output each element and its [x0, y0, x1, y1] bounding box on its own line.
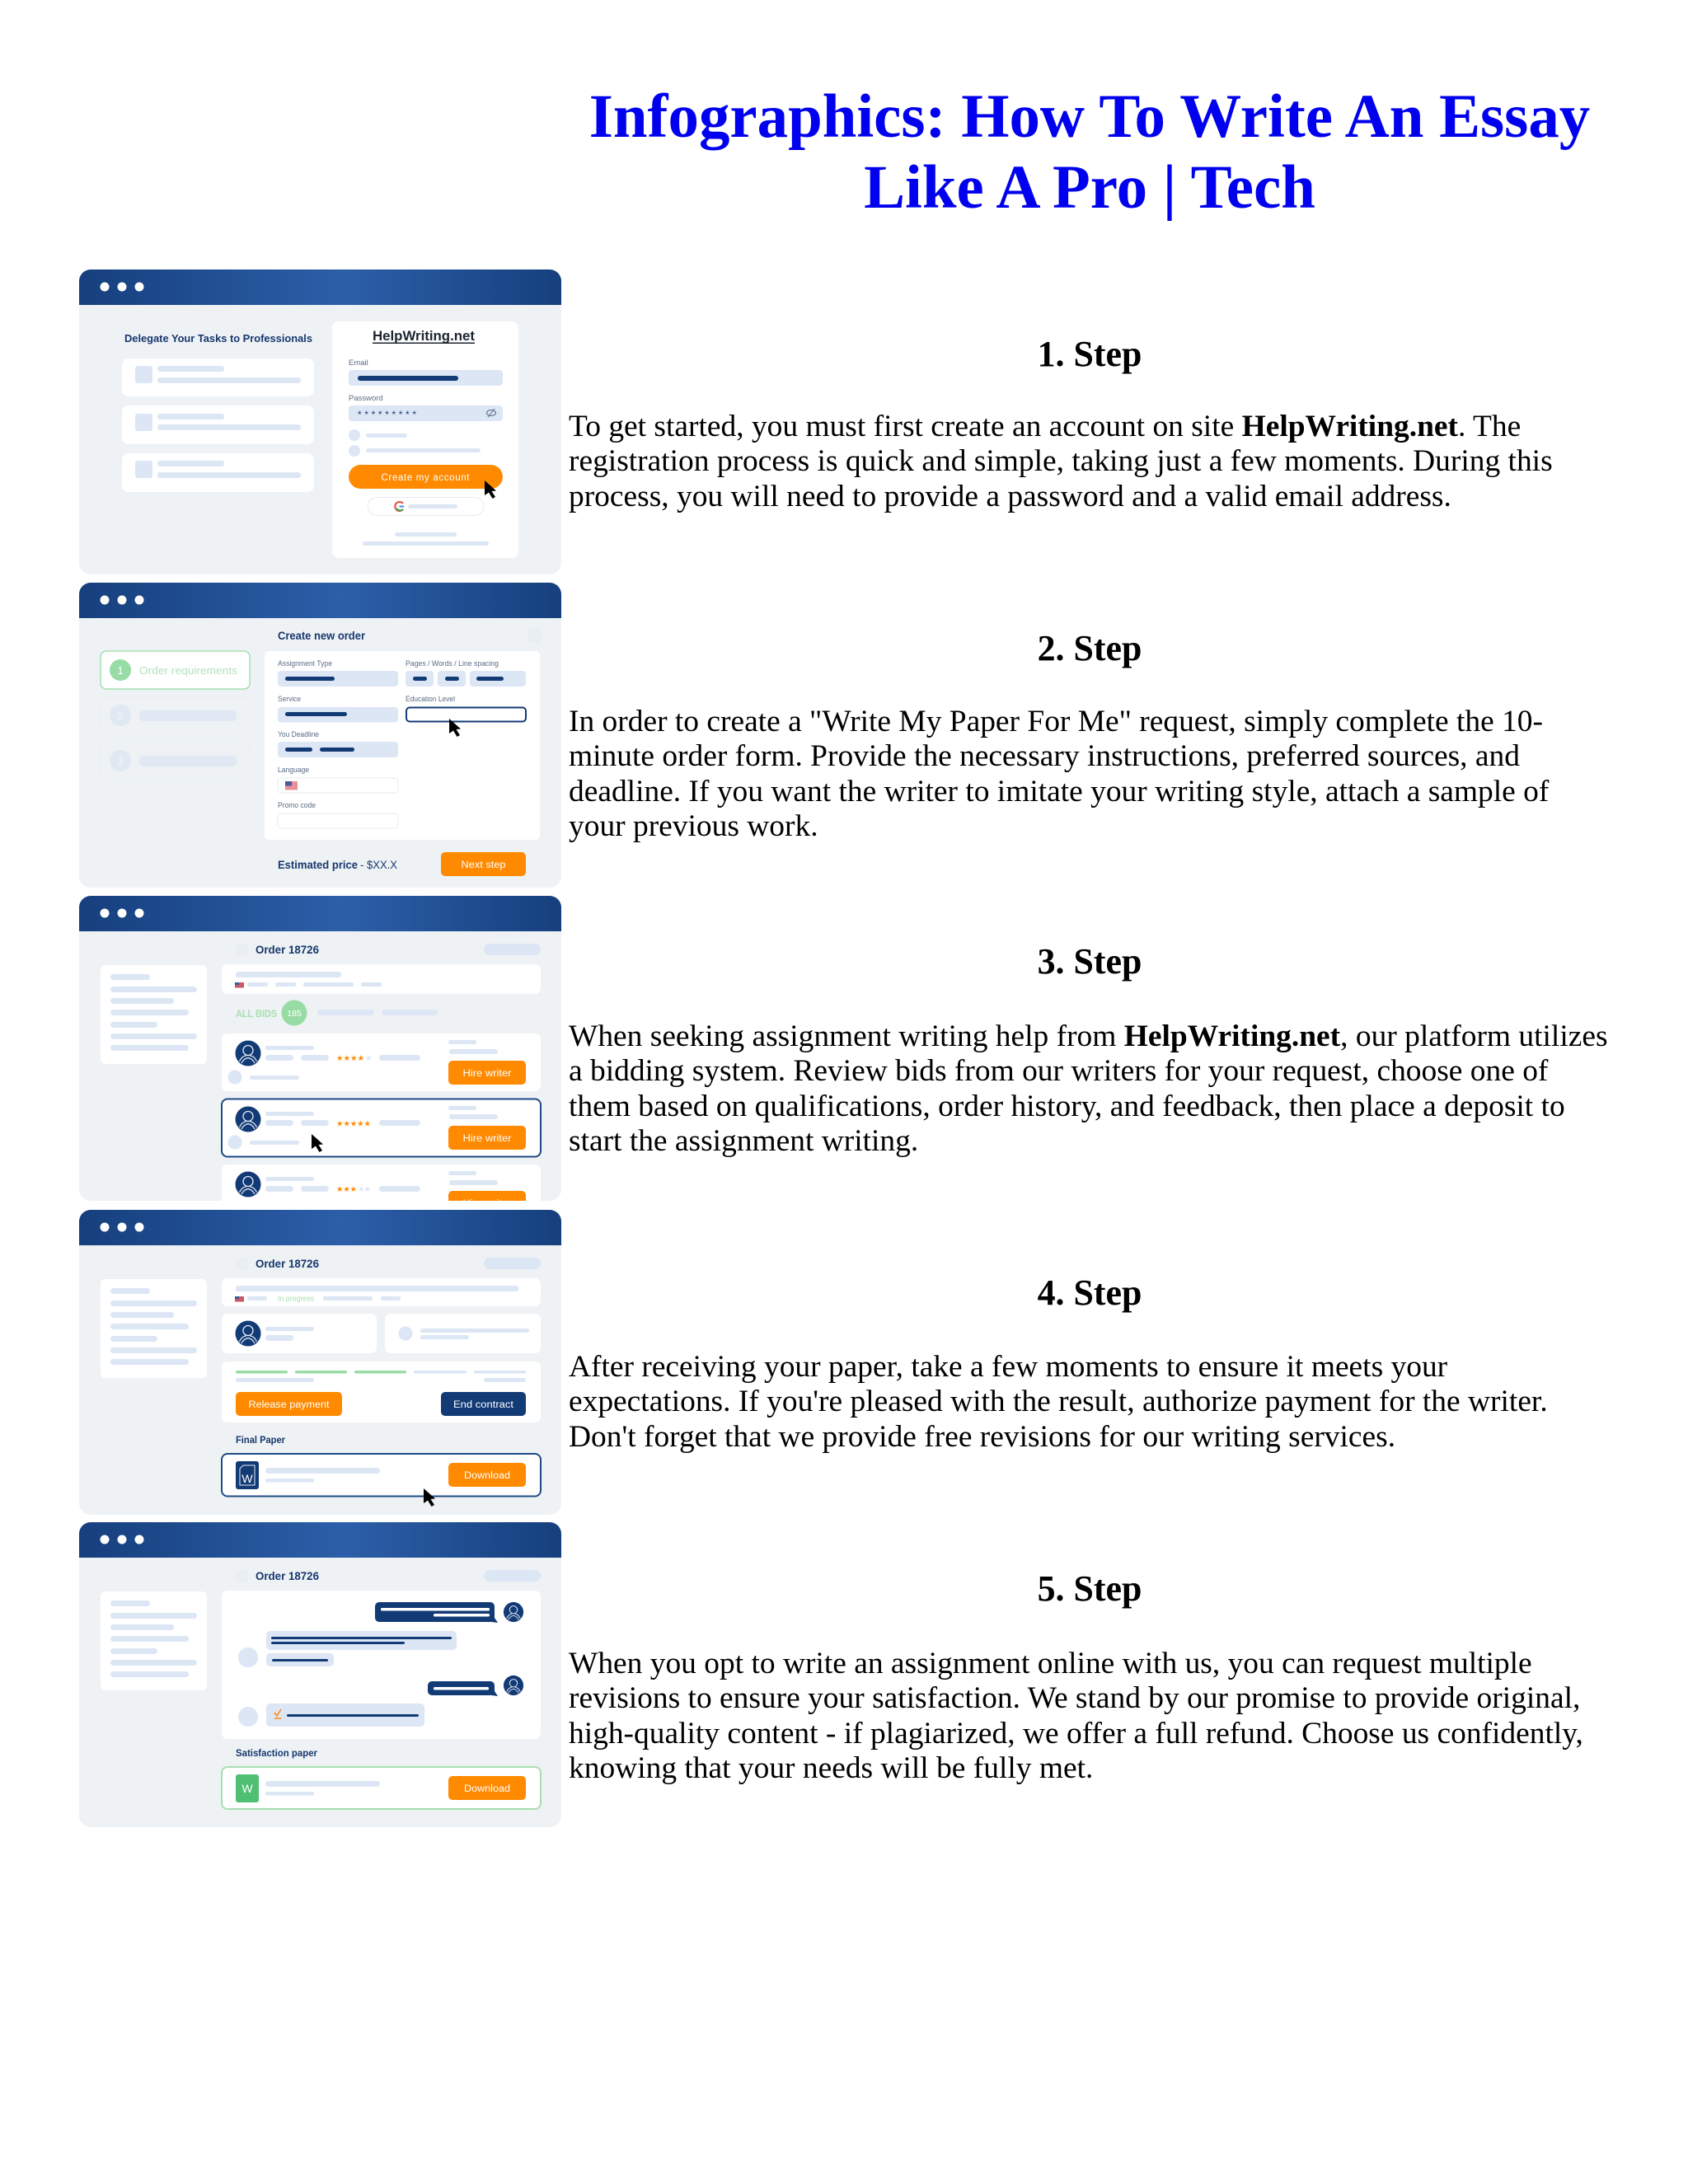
sidebar [101, 965, 207, 1064]
all bids counter: 185 [287, 1009, 302, 1019]
panel: step 3 screenshot [79, 896, 561, 1201]
satisfaction paper card [222, 1767, 541, 1809]
title: Infographics: How To Write An Essay [589, 82, 1590, 150]
bid card 2 selected: Hire writer [463, 1134, 512, 1144]
estimated price: Estimated price [278, 859, 358, 871]
heading: order number: Order 18726 [256, 1257, 319, 1270]
step 1 text: process, you will need to provide a password and a valid email address. [569, 480, 1451, 513]
estimated price: - $XX.X [360, 859, 397, 871]
order form card: Promo code [278, 801, 316, 810]
heading: delegate tasks: Delegate Your Tasks to Professionals [124, 333, 312, 344]
satisfaction paper card: Download [464, 1784, 510, 1794]
step 3 text: start the assignment writing. [569, 1124, 918, 1158]
writer card [222, 1314, 377, 1353]
estimated price [278, 859, 397, 871]
step 4 text: expectations. If you're pleased with the result, authorize payment for the writer. [569, 1385, 1548, 1418]
cursor [485, 480, 496, 499]
step 2 text: In order to create a "Write My Paper For Me" request, simply complete the 10- [569, 705, 1543, 738]
sign-up form card: ********* [358, 409, 416, 420]
final paper card: Download [464, 1471, 510, 1481]
site name: HelpWriting.net [373, 328, 475, 344]
button: next step [441, 852, 526, 876]
panel: step 5 screenshot [79, 1522, 561, 1827]
final paper card [222, 1454, 541, 1497]
heading: final paper: Final Paper [236, 1434, 285, 1446]
step 3 text: them based on qualifications, order history, and feedback, then place a deposit to [569, 1090, 1565, 1122]
all bids counter: ALL BIDS [236, 1008, 277, 1019]
title: Like A Pro | Tech [864, 153, 1315, 221]
heading: create new order: Create new order [278, 629, 366, 642]
order form card: Assignment Type [278, 659, 332, 668]
progress card [222, 1361, 541, 1422]
step 5 text: When you opt to write an assignment online with us, you can request multiple [569, 1647, 1532, 1680]
step 5 heading: 5. Step [1038, 1569, 1142, 1609]
step 2 text: deadline. If you want the writer to imitate your writing style, attach a sample of [569, 775, 1549, 808]
panel: step 4 screenshot [79, 1210, 561, 1515]
sign-up form card [332, 321, 518, 558]
button: create my account [349, 465, 503, 489]
step 3 heading: 3. Step [1038, 941, 1142, 981]
title [589, 82, 1590, 221]
step 5 text: knowing that your needs will be fully met. [569, 1751, 1093, 1785]
order summary card [222, 1278, 541, 1306]
cursor [449, 719, 461, 737]
order summary card [222, 964, 541, 994]
bid card 1: ★ [365, 1054, 373, 1063]
message in 2 [266, 1704, 424, 1727]
step 4 text: After receiving your paper, take a few moments to ensure it meets your [569, 1350, 1447, 1384]
bid card 3 clipped [222, 1165, 541, 1222]
step 1 text: registration process is quick and simple, taking just a few moments. During this [569, 444, 1553, 478]
step 5 text [569, 1647, 1583, 1785]
step 4 heading: 4. Step [1038, 1272, 1142, 1312]
cursor [312, 1134, 323, 1152]
customer card [385, 1314, 541, 1353]
order summary card: In progress [278, 1294, 314, 1302]
step 5 text: revisions to ensure your satisfaction. We stand by our promise to provide original, [569, 1681, 1580, 1715]
chat card [222, 1591, 541, 1739]
step 3 text: a bidding system. Review bids from our writers for your request, choose one of [569, 1054, 1548, 1088]
step 1 text [569, 410, 1553, 513]
message out 1 [375, 1602, 498, 1623]
step 2 text [569, 705, 1550, 843]
sidebar [101, 1591, 207, 1690]
bid card 1: Hire writer [463, 1069, 512, 1079]
icon: word document green: W [241, 1782, 253, 1795]
button: create my account: Create my account [381, 473, 470, 483]
step list: 2 [117, 710, 124, 722]
order form card: Pages / Words / Line spacing [406, 659, 499, 668]
step list: Order requirements [139, 664, 238, 677]
bid card 3 clipped: ★★ [358, 1185, 371, 1194]
button: release payment [236, 1392, 342, 1416]
order form card: You Deadline [278, 730, 319, 739]
icon: word document: W [241, 1472, 253, 1485]
step 2 text: minute order form. Provide the necessary instructions, preferred sources, and [569, 739, 1520, 773]
bid card 2 selected: ★★★★★ [336, 1119, 371, 1129]
step 4 text [569, 1350, 1548, 1454]
icon: word document [236, 1461, 259, 1489]
step 2 heading: 2. Step [1038, 628, 1142, 668]
step list: 3 [117, 755, 124, 767]
all bids counter [236, 1001, 438, 1025]
sidebar [101, 1279, 207, 1378]
google button [368, 498, 484, 516]
heading: order number: Order 18726 [256, 943, 319, 956]
step 4 text: Don't forget that we provide free revisions for our writing services. [569, 1419, 1395, 1454]
step 3 text [569, 1019, 1608, 1158]
step 3 text: When seeking assignment writing help from HelpWriting.net, our platform utilizes [569, 1019, 1608, 1053]
order form card: Education Level [406, 695, 455, 704]
step 1 text: To get started, you must first create an account on site HelpWriting.net. The [569, 410, 1521, 443]
bid card 1: ★★★★ [336, 1054, 364, 1063]
cursor [424, 1488, 435, 1507]
order form card: Service [278, 695, 301, 704]
browser header [79, 896, 561, 931]
browser header [79, 583, 561, 618]
icon: word document green [236, 1774, 259, 1802]
sign-up form card: Email [349, 359, 368, 368]
bid card 1 [222, 1033, 541, 1091]
heading: satisfaction paper: Satisfaction paper [236, 1747, 317, 1759]
step 1 heading: 1. Step [1038, 335, 1142, 374]
button: end contract: End contract [453, 1400, 514, 1410]
button: end contract [441, 1392, 526, 1416]
panel: step 2 screenshot [79, 583, 561, 888]
bid card 2 selected [222, 1099, 541, 1157]
button: release payment: Release payment [249, 1400, 330, 1410]
browser header [79, 269, 561, 305]
browser header [79, 1522, 561, 1558]
bid card 3 clipped: ★★★ [336, 1185, 357, 1194]
message in 1 [266, 1631, 457, 1666]
step list [101, 651, 250, 780]
step 5 text: high-quality content - if plagiarized, we offer a full refund. Choose us confidently, [569, 1716, 1583, 1750]
message out 2 [428, 1681, 498, 1696]
order form card: Language [278, 766, 309, 775]
left placeholder cards [122, 359, 314, 492]
step 2 text: your previous work. [569, 809, 818, 843]
panel: step 1 screenshot [79, 269, 561, 574]
heading: order number: Order 18726 [256, 1569, 319, 1582]
order form card [265, 651, 540, 840]
browser header [79, 1210, 561, 1245]
button: next step: Next step [462, 860, 506, 870]
step list: 1 [117, 664, 124, 677]
sign-up form card: Password [349, 394, 383, 403]
